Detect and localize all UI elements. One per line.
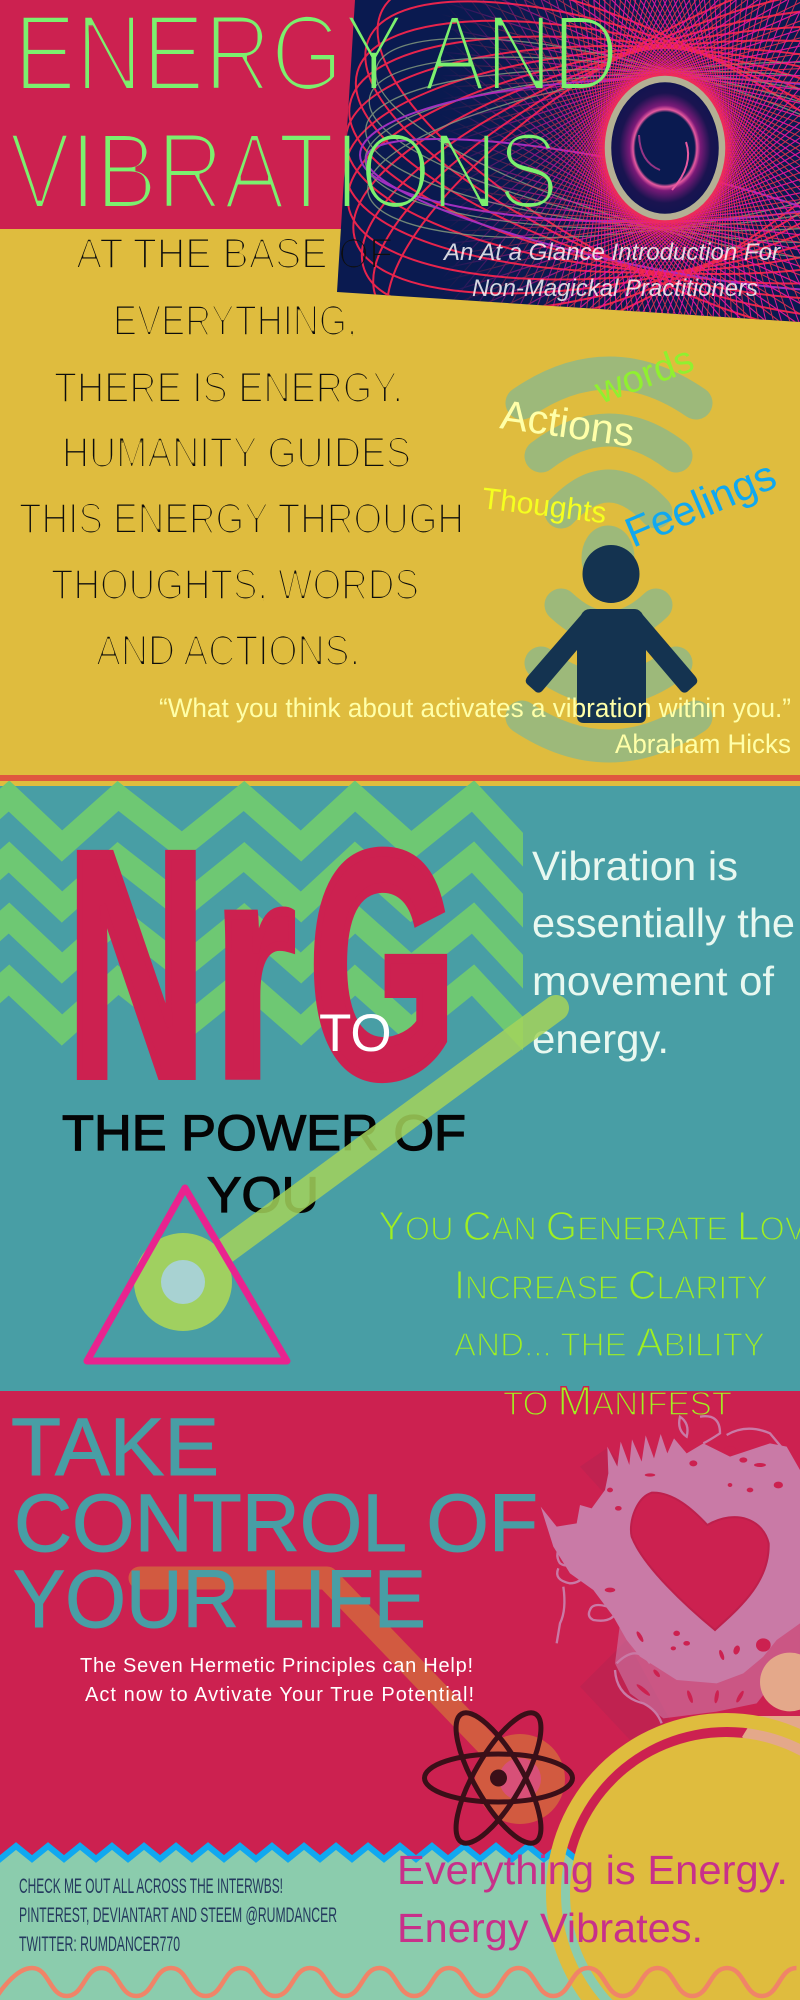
title: energy and vibrations <box>9 0 619 231</box>
lever <box>183 1008 556 1282</box>
label: actions: Actions <box>498 391 637 456</box>
subtitle <box>442 239 781 302</box>
peach circle <box>760 1653 800 1711</box>
quote: “What you think about activates a vibration within you.” <box>159 693 791 723</box>
text: you can generate: AND... THE ABILITY <box>454 1319 765 1365</box>
text: social links: PINTEREST, DEVIANTART AND STEEM @RUMDANCER <box>19 1904 337 1927</box>
disk <box>570 1737 800 2000</box>
text: vibration definition <box>532 843 795 1062</box>
vibration waves <box>522 373 696 746</box>
text block: base of everything statement: THOUGHTS, WORDS <box>51 561 419 609</box>
text block: base of everything statement: HUMANITY GUIDES <box>62 429 411 477</box>
text: TO: TO <box>319 1004 392 1063</box>
heading: NrG: r <box>214 801 295 1140</box>
text: hermetic principles: Act now to Avtivate Your True Potential! <box>85 1684 474 1706</box>
text: you can generate: INCREASE CLARITY <box>454 1262 768 1308</box>
shape: yellow ring and disk <box>546 1713 800 2000</box>
background diamonds <box>580 1448 670 1740</box>
heading: take control of your life <box>11 1402 538 1645</box>
text: vibration definition: Vibration is <box>532 843 738 889</box>
label: thoughts: Thoughts <box>480 482 608 530</box>
text: social links <box>19 1875 337 1956</box>
heading: take control of your life accent line <box>140 1578 520 1779</box>
text: everything is energy: Everything is Energy. <box>397 1847 788 1893</box>
pattern: green chevrons <box>0 796 540 1052</box>
heading: NrG: G <box>309 785 456 1143</box>
text: vibration definition: movement of <box>532 958 775 1004</box>
circle centre <box>161 1260 205 1304</box>
panel: red title block <box>0 0 360 229</box>
heading: NrG <box>67 785 456 1143</box>
title: energy and vibrations: VIBRATIONS <box>9 110 559 231</box>
image: spirograph energy spiral <box>337 0 800 322</box>
lace strokes <box>557 1416 787 1723</box>
subtitle: Non-Magickal Practitioners <box>472 275 758 302</box>
text: vibration definition: energy. <box>532 1016 669 1062</box>
text: social links: CHECK ME OUT ALL ACROSS THE INTERWBS! <box>19 1875 283 1898</box>
orange node circle <box>475 1734 565 1824</box>
text block: base of everything statement <box>19 230 464 675</box>
stripe: red divider <box>0 775 800 781</box>
illustration: ornate heart <box>541 1416 800 1740</box>
subtitle: An At a Glance Introduction For <box>442 239 781 266</box>
text: hermetic principles: The Seven Hermetic Principles can Help! <box>80 1655 473 1677</box>
heart splatter <box>541 1434 800 1683</box>
text block: base of everything statement: AT THE BASE OF <box>76 230 393 278</box>
heading: take control of your life: CONTROL OF <box>14 1478 538 1569</box>
label: words: words <box>589 338 699 413</box>
text: everything is energy: Energy Vibrates. <box>397 1905 703 1951</box>
wave border <box>0 1968 796 1996</box>
ring <box>546 1713 800 2000</box>
panel: yellow intro background <box>0 0 800 776</box>
text: you can generate <box>378 1203 800 1365</box>
text block: base of everything statement: THIS ENERGY THROUGH <box>19 495 464 543</box>
heading: NrG: N <box>67 785 206 1143</box>
heading: the power of you: THE POWER OF <box>62 1105 466 1161</box>
heading: the power of you: YOU <box>207 1167 319 1223</box>
heading: take control of your life: TAKE <box>11 1402 219 1493</box>
icon: atom <box>424 1702 572 1854</box>
zigzag border <box>0 1846 608 1859</box>
heading: the power of you <box>62 1105 466 1223</box>
pink node circle <box>499 1758 541 1800</box>
text: social links: TWITTER: RUMDANCER770 <box>19 1933 180 1956</box>
text: hermetic principles <box>80 1655 474 1706</box>
circle <box>134 1233 232 1331</box>
splatter specks <box>605 1446 783 1704</box>
diagram: lever line with circle and triangle <box>87 1008 556 1361</box>
peach band <box>742 1716 800 1785</box>
lower lace wash <box>615 1597 800 1718</box>
text: vibration definition: essentially the <box>532 900 795 946</box>
icon: vibrating person <box>522 373 697 746</box>
text: to manifest: TO MANIFEST <box>503 1378 732 1424</box>
triangle <box>87 1188 287 1361</box>
text block: base of everything statement: THERE IS ENERGY. <box>54 364 403 412</box>
panel: green footer <box>0 1846 800 2000</box>
text: everything is energy <box>397 1847 788 1951</box>
text block: base of everything statement: AND ACTIONS. <box>96 627 360 675</box>
text block: base of everything statement: EVERYTHING, <box>113 297 357 345</box>
label: feelings: Feelings <box>618 451 783 556</box>
person figure <box>526 545 697 723</box>
panel: red control section <box>0 1391 800 1871</box>
quote: Abraham Hicks <box>615 729 791 759</box>
heading: take control of your life: YOUR LIFE <box>13 1554 426 1645</box>
panel: teal energy section <box>0 786 800 1391</box>
quote <box>159 693 791 759</box>
heart <box>631 1493 769 1630</box>
